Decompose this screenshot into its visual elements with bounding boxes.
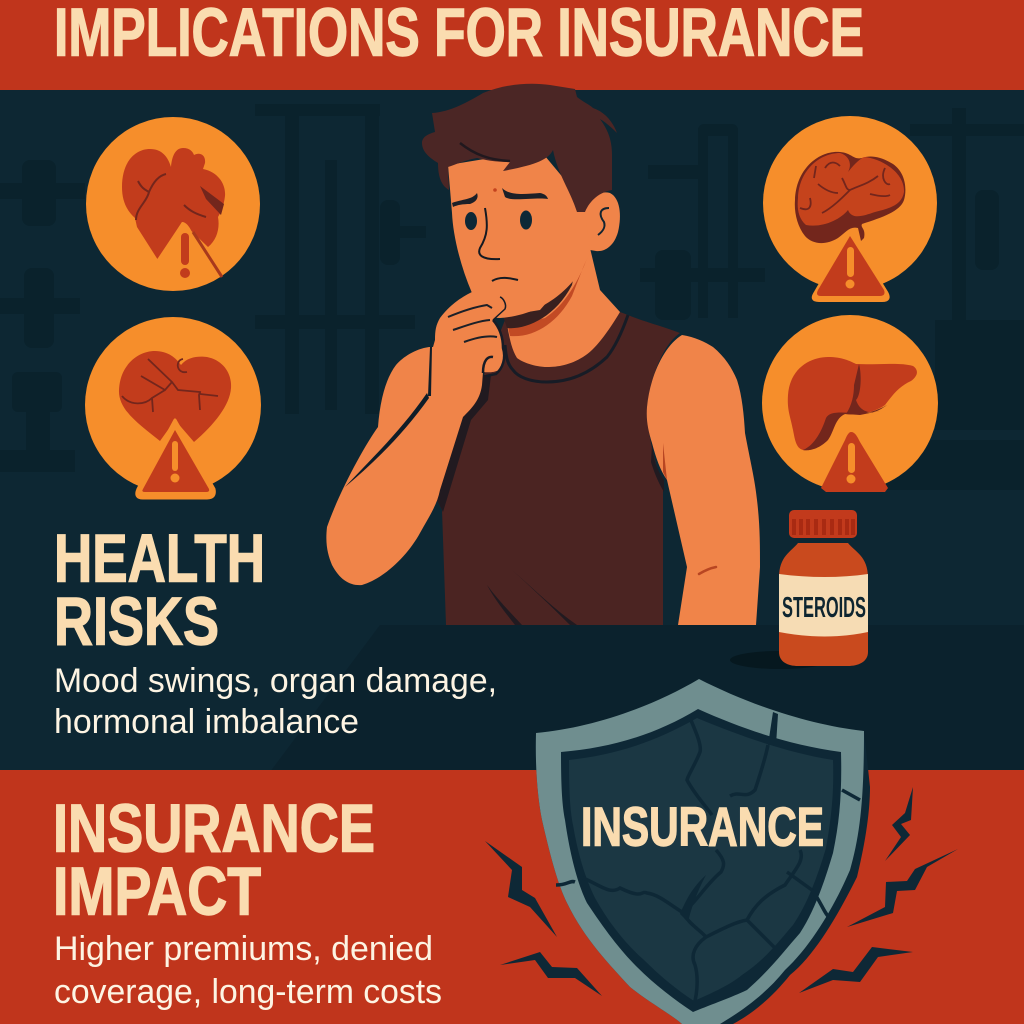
illustration: steroid bottle [730,510,868,669]
icon: cracked heart [85,317,261,498]
text: insurance impact description: coverage, long-term costs [54,973,442,1011]
heading: insurance impact: IMPACT [53,854,261,930]
text: health risks description: Mood swings, organ damage, [54,662,497,700]
heading: insurance impact [53,790,375,930]
panel: insurance impact band [0,770,1024,1024]
jaw shadow [508,250,590,336]
table surface [270,625,1024,772]
text: health risks description [54,662,497,741]
warning triangle [821,432,888,492]
tank top [437,312,680,625]
collar line [505,315,628,382]
arm and hand on chin [326,290,506,585]
shield label: INSURANCE [581,796,824,858]
shirt shading [436,375,577,625]
icon: lightning cracks [485,787,958,996]
heading: health risks: RISKS [54,584,219,660]
warning triangle [813,232,889,301]
heading: insurance impact: INSURANCE [53,790,375,866]
panel: title band [0,0,1024,90]
warning triangle [137,420,214,498]
right arm [647,335,760,625]
heading: health risks: HEALTH [54,520,265,596]
panel: dark gym background [0,88,1024,772]
heading: health risks [54,520,265,660]
illustration: worried man [326,84,760,625]
neck [505,248,620,367]
shield cracks [556,718,860,1005]
hair [422,84,617,212]
icon: damaged heart [86,117,260,291]
face [448,150,590,318]
text: health risks description: hormonal imbalance [54,703,359,741]
text: insurance impact description: Higher premiums, denied [54,930,433,968]
ear [585,192,620,251]
icon: cracked shield [536,679,870,1024]
text: insurance impact description [54,930,442,1011]
icon: damaged liver [762,315,938,492]
icon: damaged brain [763,116,937,301]
bottle label: STEROIDS [782,592,866,624]
facial features [452,188,548,281]
